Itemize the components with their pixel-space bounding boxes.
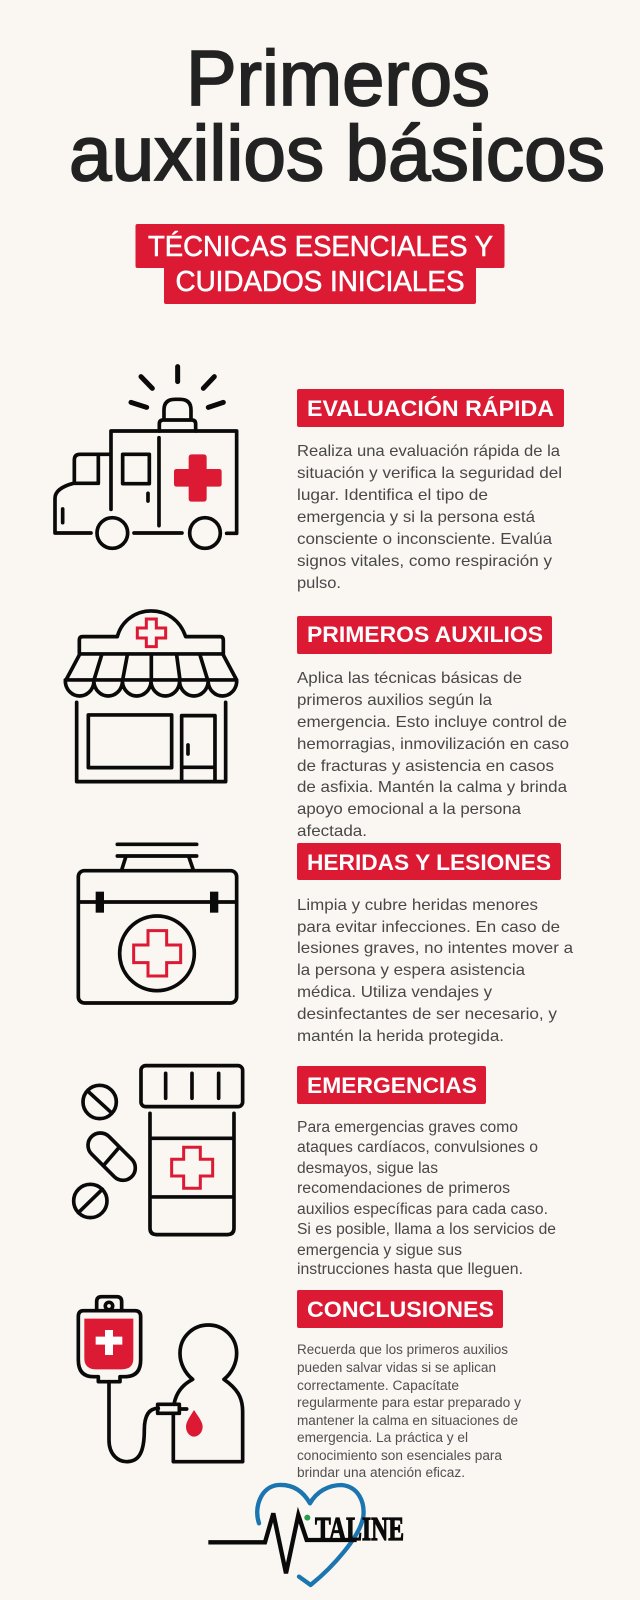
section: heridas y lesiones: lesiones graves, no intentes mover a [297,940,573,957]
section: heridas y lesiones [297,843,573,1045]
section: emergencias: emergencia y sigue sus [297,1242,462,1259]
section: emergencias: Si es posible, llama a los servicios de [297,1221,556,1238]
section: emergencias [297,1066,556,1278]
section: conclusiones: CONCLUSIONES [307,1297,494,1322]
section: primeros auxilios: hemorragias, inmovilización en caso [297,736,569,753]
section: evaluación rápida: Realiza una evaluación rápida de la [297,443,560,460]
icon: IV drip and patient [78,1297,243,1462]
title: Primeros [186,34,490,122]
section: heridas y lesiones: para evitar infecciones. En caso de [297,919,560,936]
section: primeros auxilios: de asfixia. Mantén la calma y brinda [297,779,567,796]
section: primeros auxilios: afectada. [297,823,367,840]
section: heridas y lesiones: desinfectantes de ser necesario, y [297,1006,557,1023]
section: evaluación rápida [297,389,564,592]
section: emergencias: recomendaciones de primeros [297,1180,510,1197]
icon: ambulance [55,367,237,548]
section: evaluación rápida: pulso. [297,575,341,592]
icon: pill bottle [74,1066,243,1235]
section: evaluación rápida: signos vitales, como respiración y [297,553,552,570]
section: emergencias: Para emergencias graves como [297,1119,518,1136]
section: evaluación rápida: lugar. Identifica el tipo de [297,487,488,504]
section: heridas y lesiones: HERIDAS Y LESIONES [307,850,551,875]
section: primeros auxilios: emergencia. Esto incluye control de [297,714,567,731]
logo: Vitaline [208,1485,404,1585]
icon: pharmacy store [65,611,237,782]
section: emergencias: desmayos, sigue las [297,1160,438,1177]
title: auxilios básicos [69,109,605,197]
section: heridas y lesiones: médica. Utiliza vendajes y [297,984,492,1001]
icon: first aid kit [78,844,237,1003]
section: heridas y lesiones: Limpia y cubre heridas menores [297,897,538,914]
section: conclusiones [297,1290,521,1480]
section: evaluación rápida: emergencia y si la persona está [297,509,535,526]
logo: Vitaline: TALINE [315,1511,404,1548]
section: emergencias: instrucciones hasta que lleguen. [297,1261,523,1278]
section: emergencias: EMERGENCIAS [307,1073,477,1098]
section: primeros auxilios: primeros auxilios según la [297,692,492,709]
section: heridas y lesiones: mantén la herida protegida. [297,1028,504,1045]
section: conclusiones: conocimiento son esenciales para [297,1448,502,1463]
section: evaluación rápida: EVALUACIÓN RÁPIDA [307,396,554,421]
section: conclusiones: regularmente para estar preparado y [297,1395,521,1410]
title [69,34,605,197]
section: evaluación rápida: situación y verifica la seguridad del [297,465,562,482]
section: conclusiones: emergencia. La práctica y el [297,1430,468,1445]
section: conclusiones: brindar una atención eficaz. [297,1465,465,1480]
section: emergencias: auxilios específicas para cada caso. [297,1201,548,1218]
section: primeros auxilios: apoyo emocional a la persona [297,801,521,818]
subtitle banner [136,224,504,304]
section: conclusiones: pueden salvar vidas si se aplican [297,1360,496,1375]
section: primeros auxilios: PRIMEROS AUXILIOS [307,622,543,647]
section: primeros auxilios: Aplica las técnicas básicas de [297,670,522,687]
section: conclusiones: mantener la calma en situaciones de [297,1413,518,1428]
section: conclusiones: correctamente. Capacítate [297,1378,459,1393]
section: evaluación rápida: consciente o inconsciente. Evalúa [297,531,552,548]
section: emergencias: ataques cardíacos, convulsiones o [297,1139,538,1156]
subtitle banner: TÉCNICAS ESENCIALES Y [148,230,493,263]
section: heridas y lesiones: la persona y espera asistencia [297,962,525,979]
section: primeros auxilios: de fracturas y asistencia en casos [297,758,554,775]
section: primeros auxilios [297,616,569,840]
subtitle banner: CUIDADOS INICIALES [176,266,464,298]
section: conclusiones: Recuerda que los primeros auxilios [297,1342,508,1357]
